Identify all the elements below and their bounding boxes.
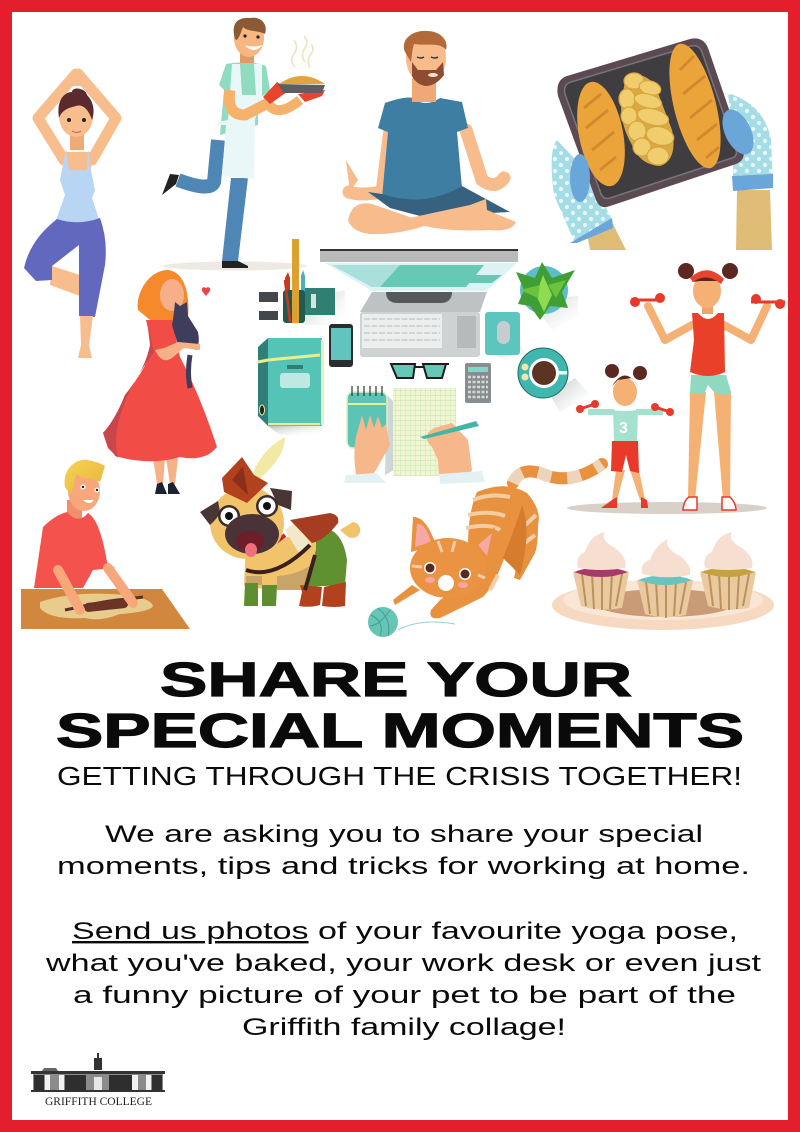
cupcake right [700,532,756,610]
mother [630,263,785,510]
keyboard [360,312,480,357]
cat head [410,517,495,598]
desk accessories: clips, pencils, ruler, folder [259,239,345,325]
illustration: ginger cat stretching with yarn ball [368,464,602,637]
subtitle: GETTING THROUGH THE CRISIS TOGETHER! [57,761,742,791]
logo: Griffith College [31,1053,165,1108]
calculator [465,363,491,403]
illustration: man in apron carrying a pie [162,18,325,271]
bread loaves [569,39,731,190]
illustration: pug in hunter costume [200,437,360,607]
call to action paragraph [45,918,761,1041]
spiral notepad and hand [344,386,394,483]
heading [56,653,744,758]
logo building [31,1053,165,1092]
illustration: plate of three cupcakes [552,532,774,630]
illustration: office desk from above [258,239,590,484]
illustration: oven mitts holding a baking tray of bread [552,38,773,250]
intro paragraph: We are asking you to share your special [105,821,703,848]
call to action paragraph: a funny picture of your pet to be part of the [73,982,736,1009]
plant [516,262,578,330]
logo wordmark: GRIFFITH COLLEGE [45,1096,152,1108]
illustration: blond man rolling dough [21,460,190,629]
illustration: woman in red dress holding a cat [103,270,217,494]
daughter: 3 [619,420,628,437]
mouse and mouse pad [485,312,530,360]
braided loaf [619,73,676,166]
yarn ball [368,607,455,637]
folder [258,338,324,435]
cupcake left [573,532,629,610]
glasses [391,364,449,378]
call to action paragraph: Griffith family collage! [242,1014,566,1041]
intro paragraph: moments, tips and tricks for working at home. [57,853,750,880]
cat tail [513,464,602,483]
cupcake middle [637,539,693,618]
call to action paragraph: what you've baked, your work desk or even just [45,950,761,977]
call to action paragraph: Send us photos of your favourite yoga pose, [72,918,738,945]
coffee cup on saucer [518,348,590,412]
computer monitor [320,249,518,312]
cat body [430,486,539,618]
grid paper, writing hand and pen [393,388,485,484]
heading: SHARE YOUR [160,653,632,707]
heading: SPECIAL MOMENTS [56,704,744,758]
baking tray [557,38,744,207]
intro paragraph [57,821,750,880]
illustration: bearded man meditating [346,31,516,234]
illustration: woman in yoga tree pose [24,69,116,358]
illustration: mother and daughter lifting dumbbells [567,263,785,514]
daughter [576,364,674,508]
smartphone [329,324,353,367]
